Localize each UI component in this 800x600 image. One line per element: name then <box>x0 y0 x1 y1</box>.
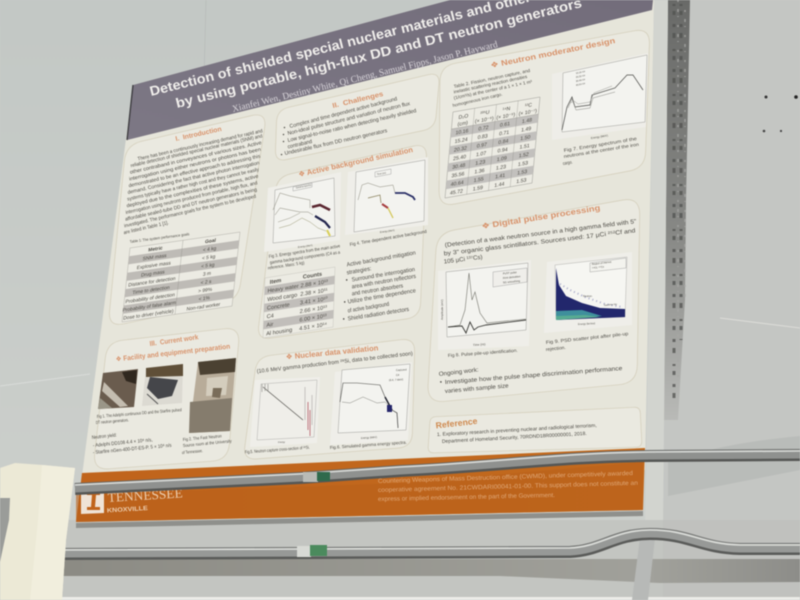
chart: fig 8 pulse pile-up: SG smoothing <box>503 279 521 284</box>
wordmark <box>107 485 183 514</box>
reference text: Department of Homeland Security, 70RDND18R00000001, 2018. <box>442 431 587 445</box>
table 2: 30.48 <box>452 163 466 171</box>
wordmark: KNOXVILLE <box>107 505 148 514</box>
reference text: 1. Exploratory research in preventing nuclear and radiological terrorism, <box>437 423 597 438</box>
logo: university square <box>81 490 104 514</box>
digital pulse description: 105 µCi ¹³⁷Cs) <box>443 254 483 265</box>
intro paragraph: investigated. The performance goals for the system to be developed <box>124 194 257 229</box>
table 2: 0.84 <box>498 138 509 146</box>
wall seam <box>664 0 798 420</box>
chart: fig 7 neutron energy spectrum: 20.32 cm <box>576 75 586 79</box>
table 2: 20.32 <box>454 146 467 154</box>
table 2: 40.64 <box>450 180 464 188</box>
chart: fig 6 simulated gamma energy spectra: (6.4, 7 MeV) <box>389 377 403 382</box>
table 1: Time to detection <box>132 285 170 296</box>
chart: fig 9 PSD scatter: Energy (keVee) <box>578 322 595 326</box>
table 2: (× 10⁻⁹) <box>475 116 494 125</box>
table 2: 1.59 <box>472 185 483 193</box>
heading: digital pulse processing: ❖ Digital pulse processing <box>481 203 601 231</box>
chart: fig 8 pulse pile-up <box>438 260 531 350</box>
chart: fig 5 neutron capture cross-section: Energy <box>278 441 286 444</box>
mitigation strategies text: area with neutron reflectors <box>351 274 417 290</box>
chart: fig 9 PSD scatter <box>544 252 632 333</box>
table 1: Drug mass <box>141 269 165 279</box>
captions and neutron yield: Neutron yield: <box>92 432 117 441</box>
captions and neutron yield: Fig 1. The Adelphi continuous DD and the Starfire pulsed <box>97 407 182 419</box>
caption: fig 7: Fig 7. Energy spectrum of the <box>563 136 638 153</box>
table 2: 1.53 <box>517 169 528 177</box>
caption: fig 9: Fig 9. PSD scatter plot after pile-up <box>546 331 629 345</box>
challenges list: Low signal-to-noise ratio when detecting heavily shielded <box>287 108 417 144</box>
panel: reference <box>428 407 642 453</box>
challenges list: • <box>282 132 285 138</box>
table 2 <box>445 97 540 198</box>
ongoing work text: Ongoing work: <box>439 367 479 378</box>
chart: fig 4 time dependent active background <box>345 157 428 235</box>
caption: fig 4: Fig 4. Time dependent active background <box>349 229 427 247</box>
table: item counts: Heavy water <box>267 284 299 295</box>
panel: nuclear data validation <box>245 340 415 459</box>
table: item counts: Wood cargo <box>267 293 297 303</box>
table 2: 0.94 <box>497 147 508 155</box>
table 2: 35.56 <box>451 171 465 180</box>
poster frame <box>645 0 668 530</box>
caption: fig 7: neutrons at the center of the iron <box>563 142 640 159</box>
funding statement: Countering Weapons of Mass Destruction office (CWMD), under competitively awarded <box>378 470 634 485</box>
table 2: 45.72 <box>450 189 463 197</box>
intro paragraph: reliable detection of shielded special nuclear materials (SNM) and <box>130 133 263 169</box>
ongoing work text: Investigate how the pulse shape discrimination performance <box>445 366 623 386</box>
chart: fig 8 pulse pile-up: PoST pulse <box>503 270 517 275</box>
lower conduit pipe <box>63 530 800 554</box>
table 1: < 4 kg <box>203 246 217 254</box>
table 1: Distance for detection <box>128 276 176 289</box>
captions and neutron yield: DT neutron generators. <box>96 417 129 425</box>
ongoing work text: • <box>440 380 442 386</box>
table 1: Metric <box>148 245 163 253</box>
chart: fig 9 PSD scatter: Region of interest <box>592 261 612 266</box>
table: item counts: 2.38 × 10¹¹ <box>300 288 328 298</box>
heading: introduction: I. Introduction <box>175 126 222 143</box>
reference text <box>437 423 597 445</box>
caption: fig 3: Fig 3. Energy spectra from the main active <box>268 243 341 259</box>
table 1: < 5 kg <box>202 254 216 262</box>
ongoing work text: varies with sample size <box>445 383 510 395</box>
challenges list: • <box>283 125 286 131</box>
table 2: 0.71 <box>499 130 510 137</box>
table 2 caption: inelastic scattering reaction densities <box>453 74 528 94</box>
table 1: < 2 s <box>200 279 212 286</box>
chart: fig 6 simulated gamma energy spectra: C4 <box>396 373 400 377</box>
mitigation strategies text: and neutron absorbers <box>351 283 404 297</box>
chart: fig 5 neutron capture cross-section <box>250 377 320 447</box>
table 2: 1.44 <box>494 181 505 189</box>
table 2: 1.51 <box>519 143 530 151</box>
chart: fig 3 energy spectra <box>264 172 341 252</box>
panel: active background simulation <box>259 145 428 338</box>
panel: challenges <box>275 74 439 160</box>
panel: introduction <box>109 115 265 324</box>
table 1: > 99% <box>198 287 213 295</box>
table 2: 1.48 <box>522 117 532 125</box>
chart: fig 3 energy spectra: Gamma spectra <box>296 183 312 189</box>
funding statement <box>378 470 639 503</box>
caption: fig 7: cargo. <box>562 159 573 166</box>
authors: Xianfei Wen, Destiny White, Qi Cheng, Samuel Fipps, Jason P. Hayward <box>231 39 499 115</box>
table 2 caption: homogeneous iron cargo. <box>452 92 503 108</box>
table: item counts: 6.00 × 10¹³ <box>299 313 327 324</box>
tape on upper pipe <box>303 472 330 482</box>
caption: fig 9 <box>546 331 629 352</box>
caption: fig 3: reference. Mass: 5 kg) <box>267 260 305 270</box>
nuclear data subtitle: (10.6 MeV gamma production from ²⁸Si, data to be collected soon) <box>256 350 413 375</box>
chart: fig 8 pulse pile-up: First derivation <box>503 274 521 280</box>
upper conduit pipe <box>75 451 800 489</box>
mitigation strategies text: Active background mitigation <box>346 250 416 268</box>
chart: fig 3 energy spectra: Energy (MeV) <box>298 244 313 249</box>
ongoing work text <box>439 366 623 395</box>
captions and neutron yield <box>92 407 233 456</box>
challenges list <box>280 96 417 158</box>
table 2 caption: Table 2. Fission, neutron capture, and <box>453 68 531 89</box>
white plastic block <box>0 463 75 600</box>
table 2: 1.09 <box>496 156 507 163</box>
photo: Adelphi generator <box>98 369 138 409</box>
chart: fig 6 simulated gamma energy spectra: Captured <box>396 367 407 372</box>
chart: fig 6 simulated gamma energy spectra: Energy (MeV) <box>361 435 377 440</box>
caption: fig 8: Fig 8. Pulse pile-up identification. <box>448 348 518 358</box>
wordmark: TENNESSEE <box>107 485 183 505</box>
table 2: 1.52 <box>518 152 529 159</box>
title: by using portable, high-flux DD and DT neutron generators <box>174 0 583 111</box>
intro paragraph: affordable sealed-tube DD and DT neutron generators is being <box>125 187 258 223</box>
caption: fig 7 <box>562 136 640 166</box>
table 2: ²³⁵U <box>480 110 490 117</box>
table 2: ¹⁴N <box>502 106 511 113</box>
intro paragraph: are listed in Table 1 [1]. <box>123 220 169 236</box>
captions: fig 5 and fig 6 <box>245 440 407 454</box>
intro paragraph: interrogation using either neutrons or photons has been <box>129 147 262 183</box>
table 2: 1.41 <box>495 173 506 180</box>
table: item counts: Al housing <box>266 327 292 338</box>
chart: fig 9 PSD scatter: Gamma ray <box>604 303 618 307</box>
captions: fig 5 and fig 6: Fig.6. Simulated gamma energy spectra. <box>330 440 407 450</box>
table 2: 1.55 <box>473 176 484 184</box>
chart: fig 9 PSD scatter: Neutron <box>583 295 593 298</box>
table 2: 0.97 <box>476 142 487 150</box>
intro paragraph: other contraband in conveyances of various sizes. Active <box>129 140 263 176</box>
table: item counts: Air <box>266 322 273 329</box>
panel: digital pulse processing <box>428 200 640 401</box>
intro paragraph: deployed due to the complexities of these systems, active <box>126 174 259 209</box>
table 2 caption <box>452 68 533 108</box>
table 2: ¹²C <box>524 102 532 110</box>
table 2: 0.72 <box>478 125 489 133</box>
footer band <box>76 448 645 522</box>
chart: fig 7 neutron energy spectrum: Energy (MeV) <box>591 133 608 140</box>
chart: fig 4 time dependent active background: Energy (MeV) <box>380 229 395 234</box>
wall area below poster <box>58 511 800 600</box>
captions: fig 5 and fig 6: Fig.5. Neutron capture cross-section of ²⁸Si. <box>245 445 310 454</box>
challenges list: Undesirable flux from DD neutron generators <box>284 128 388 157</box>
captions and neutron yield: - Starfire nGen-400-DT-ES-P. 5 × 10⁸ n/s <box>93 443 172 456</box>
panel: current work <box>92 329 239 469</box>
chart: fig 7 neutron energy spectrum <box>552 53 648 140</box>
table 2: 1.53 <box>516 178 527 185</box>
table 2: (× 10⁻⁹) <box>496 112 516 121</box>
intro paragraph: demonstrated to be an effective approach to addressing this <box>128 153 262 189</box>
photo: Fast Neutron Source room <box>189 358 236 433</box>
table 2: 1.49 <box>521 126 532 134</box>
caption: fig 3: gamma background components (C4 as a <box>269 249 341 265</box>
chart: fig 7 neutron energy spectrum: 40.64 cm <box>576 83 586 87</box>
table 1: Probability of detection <box>125 292 175 305</box>
heading: reference: Reference <box>435 416 478 430</box>
chart: fig 7 neutron energy spectrum: 10.16 cm <box>576 71 586 75</box>
intro paragraph <box>123 128 263 236</box>
heading: nuclear data validation: ❖ Nuclear data validation <box>285 343 379 361</box>
table 2: 0.83 <box>477 133 488 141</box>
table 2: 1.23 <box>496 164 506 172</box>
mitigation strategies text: • <box>342 317 345 323</box>
digital pulse description: (Detection of a weak neutron source in a high gamma field with 5" <box>445 219 637 249</box>
challenges list: Complex and time dependent active background <box>289 96 398 130</box>
table 1: Dose to driver (vehicle) <box>123 308 174 322</box>
poster sheet <box>76 0 654 522</box>
intro paragraph: systems typically have a rather high cost and they cannot be easily <box>127 167 260 203</box>
heading: challenges: II. Challenges <box>332 91 384 110</box>
table 1: Non-rad worker <box>186 302 221 313</box>
mitigation strategies text: Surround the interrogation <box>351 267 415 283</box>
table: item counts: 4.51 × 10¹⁴ <box>299 321 328 332</box>
funding statement: cooperative agreement No. 21CWDARI00041-01-00. This support does not constitute an <box>378 480 639 494</box>
caption: fig 9: rejection. <box>546 345 566 352</box>
digital pulse description: by 3" organic glass scintillators. Sources used: 17 µCi ²⁵²Cf and <box>443 227 636 257</box>
chart: fig 8 pulse pile-up: Time (ns) <box>473 342 486 347</box>
photo: Starfire generator <box>142 364 183 406</box>
funding statement: express or implied endorsement on the part of the Government. <box>378 492 555 503</box>
heading: neutron moderator design: ❖ Neutron moderator design <box>490 36 616 70</box>
heading: current work: III. Current work <box>149 334 199 348</box>
captions and neutron yield: of Tennessee. <box>182 448 203 455</box>
table: item counts: 2.66 × 10¹³ <box>300 305 327 315</box>
table: item counts <box>263 267 335 338</box>
table 1: Explosive mass <box>136 260 171 271</box>
chart: fig 4 time dependent active background: Time (ns) <box>377 172 386 176</box>
title band <box>127 0 653 140</box>
table 2: 1.53 <box>518 160 528 168</box>
intro paragraph: demand. Considering the fact that active photon interrogation <box>127 160 260 196</box>
table: item counts: Counts <box>303 272 322 281</box>
intro paragraph: There has been a continuously increasing demand for rapid and <box>137 128 263 162</box>
table 1: Goal <box>205 238 217 245</box>
table 2: 1.23 <box>475 159 486 167</box>
table: item counts: Item <box>270 278 281 286</box>
table: item counts: 2.88 × 10¹³ <box>300 279 328 289</box>
mitigation strategies text: Utilize the time dependence <box>347 288 416 305</box>
captions and neutron yield: - Adelphi DD108 4.4 × 10⁸ n/s, <box>93 437 153 449</box>
heading: facility and equipment preparation: ❖ Facility and equipment preparation <box>115 343 230 363</box>
table 2: (× 10⁻⁷) <box>518 108 537 117</box>
table: item counts: Concrete <box>267 302 290 312</box>
table 1: 3 m <box>202 271 211 278</box>
table 2: 25.40 <box>453 154 466 162</box>
mitigation strategies text: • <box>345 278 348 284</box>
chart: fig 8 pulse pile-up: Amplitude (mV) <box>440 299 444 320</box>
table 2: 0.61 <box>500 121 510 129</box>
table 2: (cm) <box>457 120 468 128</box>
mitigation strategies text: Shield radiation detectors <box>347 307 410 322</box>
challenges list: • <box>282 139 285 145</box>
mitigation strategies text: of active background <box>347 302 390 314</box>
caption: fig 3 <box>267 243 341 270</box>
table 1: Probability of false alarm <box>122 300 176 314</box>
panel: neutron moderator design <box>439 30 649 204</box>
mitigation strategies text <box>342 250 417 323</box>
digital pulse description <box>443 219 637 265</box>
table 2: 1.36 <box>474 168 485 176</box>
table 2: 1.07 <box>476 151 486 158</box>
table 2: 15.24 <box>454 137 468 145</box>
challenges list: contraband <box>287 139 313 150</box>
table 1: < 1% <box>198 295 211 303</box>
chart: fig 7 neutron energy spectrum: 30.48 cm <box>576 79 586 83</box>
vertical conduit <box>632 538 655 600</box>
captions and neutron yield: Fig 2. The Fast Neutron <box>183 433 222 442</box>
challenges list: • <box>280 152 283 158</box>
chart: fig 6 simulated gamma energy spectra <box>330 362 412 445</box>
table 1 <box>121 232 240 322</box>
mitigation strategies text: • <box>343 300 346 306</box>
table 1: SNM mass <box>142 253 167 262</box>
table 2: 10.16 <box>455 128 469 137</box>
tape on lower pipe <box>297 545 327 557</box>
mitigation strategies text: strategies: <box>346 266 372 276</box>
challenges list: Non-ideal pulse structure and variation of neutron flux <box>287 101 411 137</box>
heading: active background simulation: ❖ Active background simulation <box>297 145 414 179</box>
table 2: D₂O <box>458 113 469 121</box>
intro paragraph: interrogation using neutrons produced from portable, high flux, and <box>125 180 258 216</box>
table 1: < 5 kg <box>201 262 215 270</box>
table: item counts: 3.41 × 10¹⁰ <box>300 295 328 307</box>
captions and neutron yield: Source room at the University <box>183 438 233 448</box>
table 1 caption: Table 1: The system performance goals <box>130 232 190 244</box>
table 2: 1.50 <box>520 135 531 142</box>
chart: fig 9 PSD scatter: ²⁵²Cf, ¹³⁷Cs <box>592 264 605 270</box>
table: item counts: C4 <box>267 313 274 320</box>
table 2 caption: (1/cm³/s) at the center of a 1 × 1 × 1 m³ <box>453 79 533 100</box>
